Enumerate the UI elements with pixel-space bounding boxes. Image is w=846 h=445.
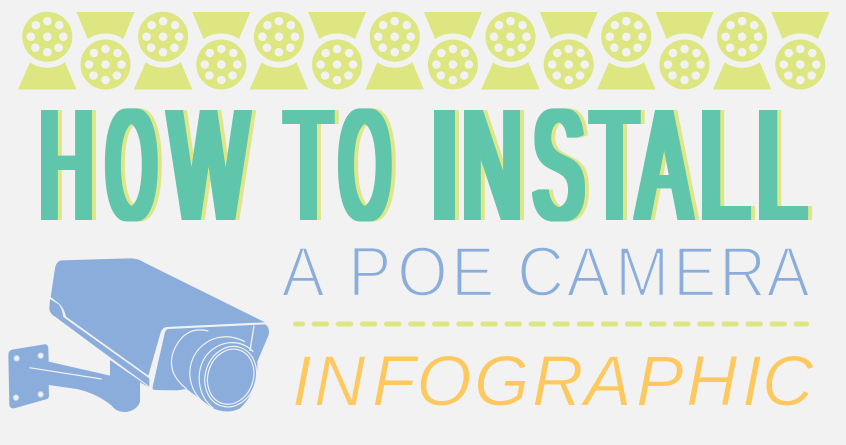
mounting screws (13, 353, 43, 400)
title: HOW TO INSTALL: H (40, 77, 93, 252)
title: HOW TO INSTALL (40, 76, 806, 253)
title: HOW TO INSTALL: S (534, 79, 583, 253)
housing lower lip (49, 299, 149, 386)
title: HOW TO INSTALL: W (170, 77, 247, 253)
subtitle: A POE CAMERA: A POE CAMERA (282, 234, 811, 312)
label: INFOGRAPHIC: INFOGRAPHIC (292, 342, 814, 422)
title: HOW TO INSTALL: T (591, 79, 637, 253)
lens ring lines (29, 326, 264, 414)
title: HOW TO INSTALL: T (285, 79, 331, 253)
dashed divider (296, 322, 806, 326)
decorative camera lens pattern band (18, 9, 829, 93)
title: HOW TO INSTALL: L (700, 79, 749, 253)
housing (51, 258, 265, 376)
title: HOW TO INSTALL: O (107, 79, 156, 253)
wall mount plate and arm (8, 344, 150, 412)
camera front and lens (153, 324, 269, 412)
title: HOW TO INSTALL: L (757, 79, 806, 253)
title: HOW TO INSTALL: I (428, 79, 461, 253)
icon: security camera (8, 258, 269, 414)
title: HOW TO INSTALL: O (340, 78, 390, 253)
title: HOW TO INSTALL: A (638, 79, 690, 253)
title: HOW TO INSTALL: N (462, 76, 522, 253)
